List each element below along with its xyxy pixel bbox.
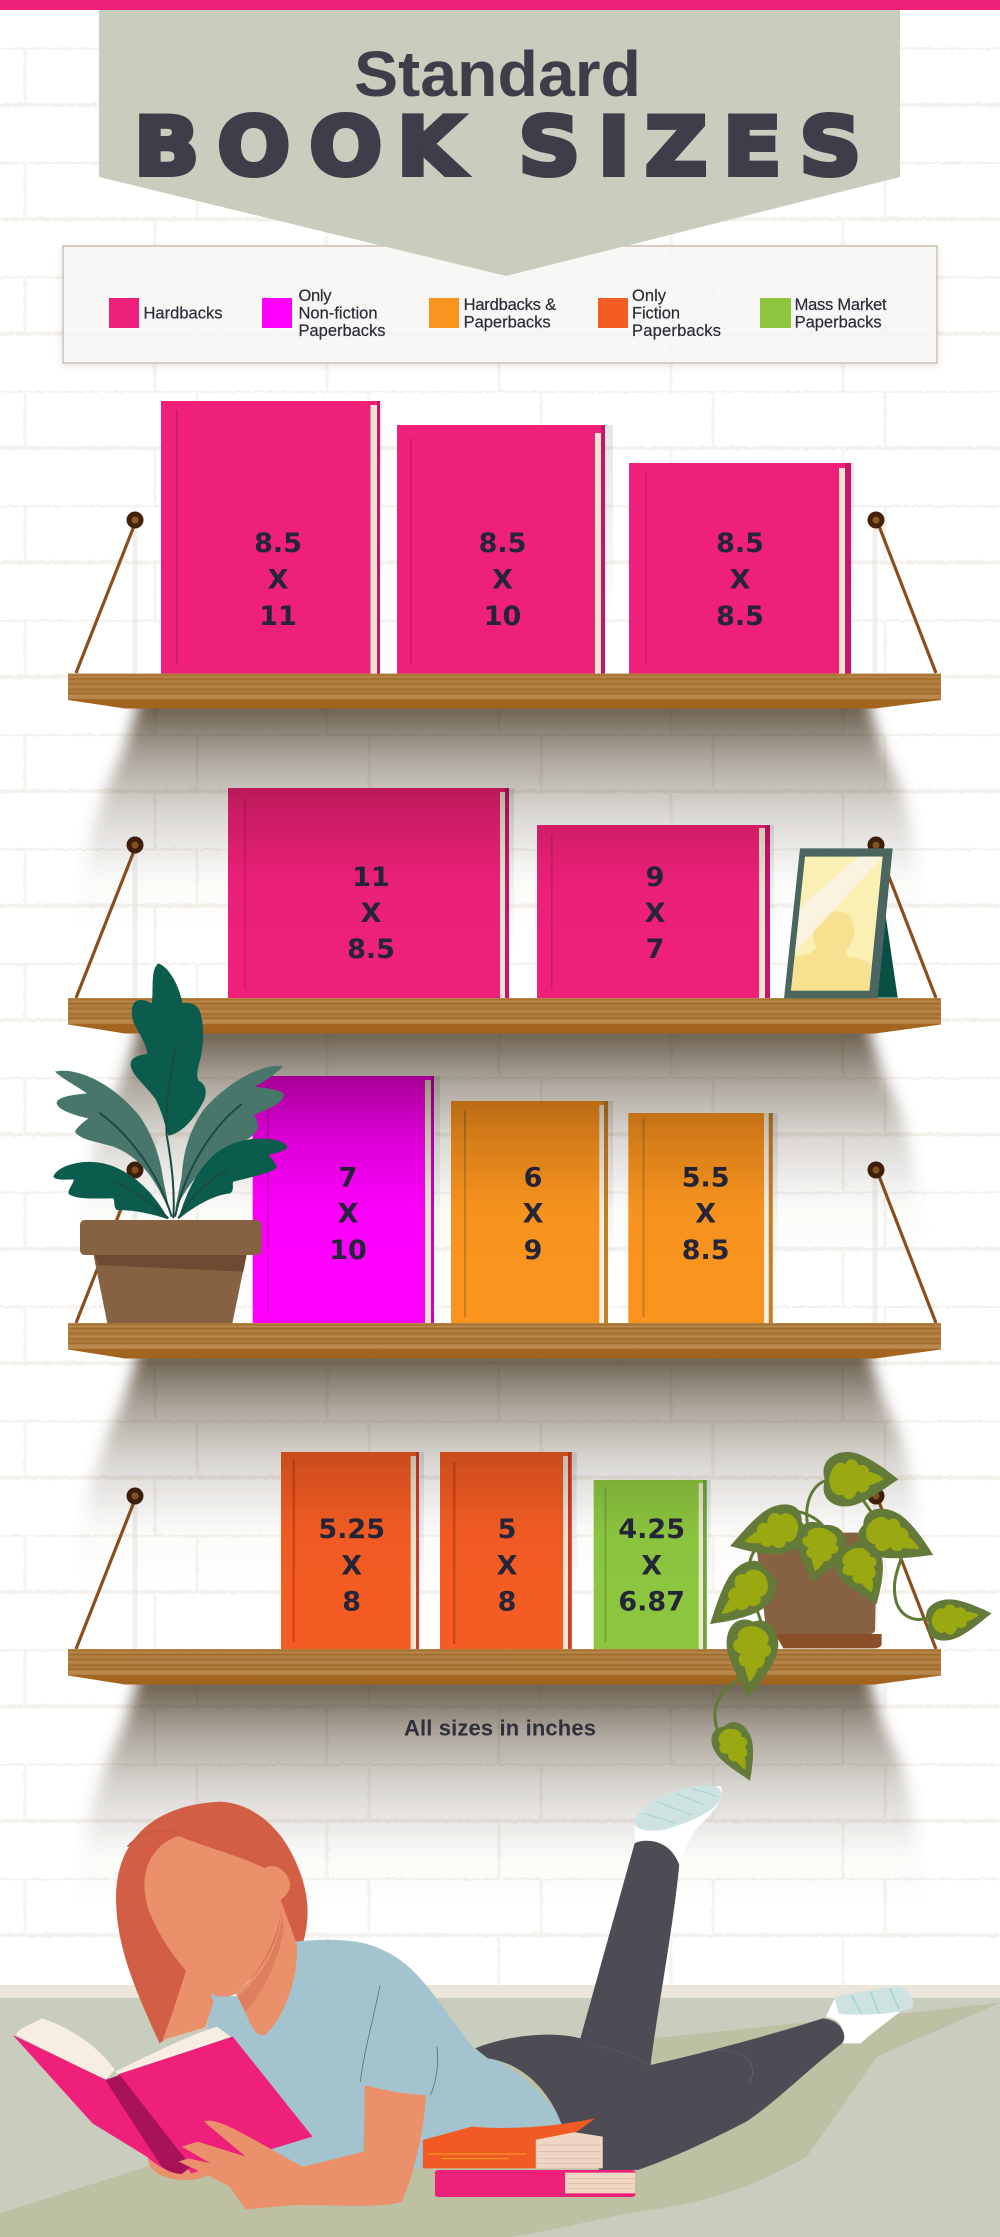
hand on chin bbox=[163, 1970, 214, 2040]
raised sock sole bbox=[635, 1785, 722, 1831]
legend: mass market paperbacks: Mass Market bbox=[795, 296, 887, 314]
spine details bbox=[427, 2154, 526, 2159]
pot rim bbox=[80, 1220, 262, 1255]
glass reflection bbox=[795, 857, 883, 952]
book: 7 x 10: 10 bbox=[329, 1235, 367, 1266]
book: 5.25 x 8: 5.25 bbox=[318, 1514, 385, 1545]
legend: only non-fiction paperbacks: Non-fiction bbox=[298, 305, 378, 323]
pink cover bbox=[435, 2170, 635, 2197]
lower sock stripes bbox=[851, 1988, 899, 2013]
spine bbox=[423, 2140, 536, 2168]
book: 4.25 x 6.87: X bbox=[641, 1550, 662, 1581]
raised sock bbox=[635, 1786, 722, 1860]
book: 5 x 8: 5 bbox=[498, 1514, 516, 1545]
book: 6 x 9: X bbox=[523, 1199, 544, 1230]
book: 5 x 8: X bbox=[497, 1550, 518, 1581]
lower sock sole bbox=[834, 1986, 913, 2015]
centre leaf bbox=[131, 963, 206, 1136]
open book bbox=[13, 2018, 313, 2174]
book: 5.5 x 8.5: X bbox=[695, 1199, 716, 1230]
picture frame bbox=[784, 848, 898, 998]
frame picture bbox=[791, 857, 883, 991]
book: 9 x 7: 7 bbox=[646, 934, 664, 965]
vines bbox=[715, 1479, 933, 1737]
book: 8.5 x 11 bbox=[161, 401, 382, 674]
face bbox=[144, 1836, 290, 1997]
right light leaf bbox=[175, 1066, 284, 1210]
woman reading bbox=[13, 1785, 913, 2209]
book: 9 x 7: 9 bbox=[646, 862, 664, 893]
left cover bbox=[13, 2035, 182, 2174]
plant on shelf 3 bbox=[53, 963, 287, 1323]
frame stand bbox=[877, 913, 898, 998]
book: 5.25 x 8: 8 bbox=[342, 1587, 361, 1618]
book: 6 x 9 bbox=[451, 1101, 613, 1324]
raised sock stripes bbox=[644, 1788, 718, 1823]
shirt bbox=[207, 1940, 564, 2168]
book: 11 x 8.5: 8.5 bbox=[347, 934, 395, 965]
legend: only non-fiction paperbacks: Paperbacks bbox=[298, 322, 386, 340]
shelf 2 bbox=[68, 998, 941, 1034]
hanging straps and nails bbox=[76, 512, 936, 1649]
frame border bbox=[784, 848, 893, 998]
trousers bbox=[475, 1841, 844, 2170]
leaf veins and stems bbox=[99, 1045, 242, 1218]
picture silhouette bbox=[791, 911, 871, 991]
left pages bbox=[16, 2018, 115, 2080]
spine bbox=[105, 2075, 191, 2174]
shelf shadows on wall bbox=[75, 690, 925, 1906]
hand behind book bbox=[148, 2157, 210, 2180]
legend: hardbacks and paperbacks bbox=[429, 296, 556, 332]
right cover bbox=[118, 2037, 313, 2173]
hanging ivy plant on shelf 4 bbox=[694, 1452, 995, 1789]
top cover bbox=[423, 2118, 595, 2140]
book: 5.5 x 8.5: 5.5 bbox=[682, 1163, 730, 1194]
saucer bbox=[775, 1634, 882, 1648]
orange book bbox=[423, 2118, 603, 2168]
pink book page edges bbox=[568, 2178, 635, 2188]
title line: BOOK SIZES: BOOKSIZES bbox=[134, 100, 861, 194]
legend: only non-fiction paperbacks: Only bbox=[298, 287, 332, 305]
book: 4.25 x 6.87: 4.25 bbox=[618, 1514, 685, 1545]
pot bbox=[757, 1533, 877, 1635]
book: 8.5 x 8.5: 8.5 bbox=[716, 601, 764, 632]
book: 11 x 8.5: X bbox=[361, 898, 382, 929]
legend: hardbacks and paperbacks: Paperbacks bbox=[464, 314, 551, 332]
pink book pages bbox=[565, 2173, 635, 2193]
leaves bbox=[55, 1071, 170, 1213]
book: 9 x 7: X bbox=[645, 898, 666, 929]
legend: mass market paperbacks bbox=[760, 296, 887, 332]
pages bbox=[534, 2132, 603, 2168]
legend: only fiction paperbacks: Only bbox=[632, 287, 667, 305]
shirt crease lines bbox=[360, 1985, 753, 2095]
book: 11 x 8.5 bbox=[228, 788, 514, 999]
shelf 3 bbox=[68, 1323, 941, 1358]
book: 5.25 x 8 bbox=[281, 1452, 424, 1650]
book: 5 x 8 bbox=[440, 1452, 577, 1650]
book: 5 x 8: 8 bbox=[498, 1587, 516, 1618]
title banner bbox=[99, 10, 900, 276]
legend: only fiction paperbacks: Paperbacks bbox=[632, 322, 721, 340]
title line: Standard: Standard bbox=[354, 38, 641, 110]
forearm and hand bbox=[179, 2085, 426, 2209]
pot shadow band bbox=[95, 1255, 247, 1272]
book: 8.5 x 11: 11 bbox=[259, 601, 297, 632]
legend: hardbacks bbox=[109, 298, 222, 328]
hair bbox=[116, 1802, 308, 2043]
legend: only non-fiction paperbacks bbox=[262, 287, 386, 340]
book: 9 x 7 bbox=[537, 825, 774, 999]
legend: only fiction paperbacks bbox=[598, 287, 721, 340]
book: 8.5 x 11: X bbox=[268, 564, 289, 596]
legend: only fiction paperbacks: Fiction bbox=[632, 305, 680, 323]
book: 7 x 10 bbox=[253, 1076, 440, 1324]
shelf 1 bbox=[68, 674, 941, 708]
book: 4.25 x 6.87: 6.87 bbox=[618, 1587, 685, 1618]
book: 7 x 10: 7 bbox=[339, 1163, 357, 1194]
book: 8.5 x 8.5: 8.5 bbox=[716, 528, 764, 559]
pink book bbox=[435, 2170, 635, 2197]
top accent bar bbox=[0, 0, 1000, 10]
book: 8.5 x 8.5 bbox=[629, 463, 854, 674]
hair highlight bbox=[128, 1831, 177, 1847]
book: 11 x 8.5: 11 bbox=[352, 862, 390, 893]
legend: hardbacks and paperbacks: Hardbacks & bbox=[464, 296, 556, 314]
ivy leaves bbox=[694, 1452, 995, 1789]
neck shading bbox=[237, 1913, 284, 2012]
book: 8.5 x 10 bbox=[397, 425, 613, 674]
book: 5.5 x 8.5: 8.5 bbox=[682, 1235, 730, 1266]
caption: all sizes in inches: All sizes in inches bbox=[404, 1716, 596, 1741]
left dark leaf bbox=[53, 1162, 168, 1219]
book: 7 x 10: X bbox=[338, 1199, 359, 1230]
page edges bbox=[537, 2145, 601, 2163]
rug shadow bbox=[0, 2003, 1000, 2237]
book: 8.5 x 10: 8.5 bbox=[479, 528, 526, 559]
neck bbox=[236, 1900, 297, 2035]
shelf 4 bbox=[68, 1649, 941, 1684]
book: 8.5 x 11: 8.5 bbox=[254, 528, 302, 559]
book: 8.5 x 10: 10 bbox=[484, 601, 521, 632]
book: 5.25 x 8: X bbox=[341, 1550, 362, 1581]
lower sock bbox=[826, 1997, 912, 2043]
right pages bbox=[115, 2027, 231, 2075]
book: 4.25 x 6.87 bbox=[594, 1480, 711, 1650]
book: 6 x 9: 6 bbox=[524, 1163, 542, 1194]
pot body bbox=[93, 1254, 247, 1323]
book: 6 x 9: 9 bbox=[524, 1235, 542, 1266]
right dark leaf bbox=[178, 1139, 287, 1219]
book: 8.5 x 10: X bbox=[492, 564, 513, 596]
book: 5.5 x 8.5 bbox=[628, 1113, 778, 1324]
legend panel bbox=[63, 246, 937, 363]
legend: mass market paperbacks: Paperbacks bbox=[795, 314, 882, 332]
book: 8.5 x 8.5: X bbox=[730, 564, 751, 596]
legend: hardbacks: Hardbacks bbox=[144, 305, 222, 323]
floor bbox=[0, 1985, 1000, 2237]
